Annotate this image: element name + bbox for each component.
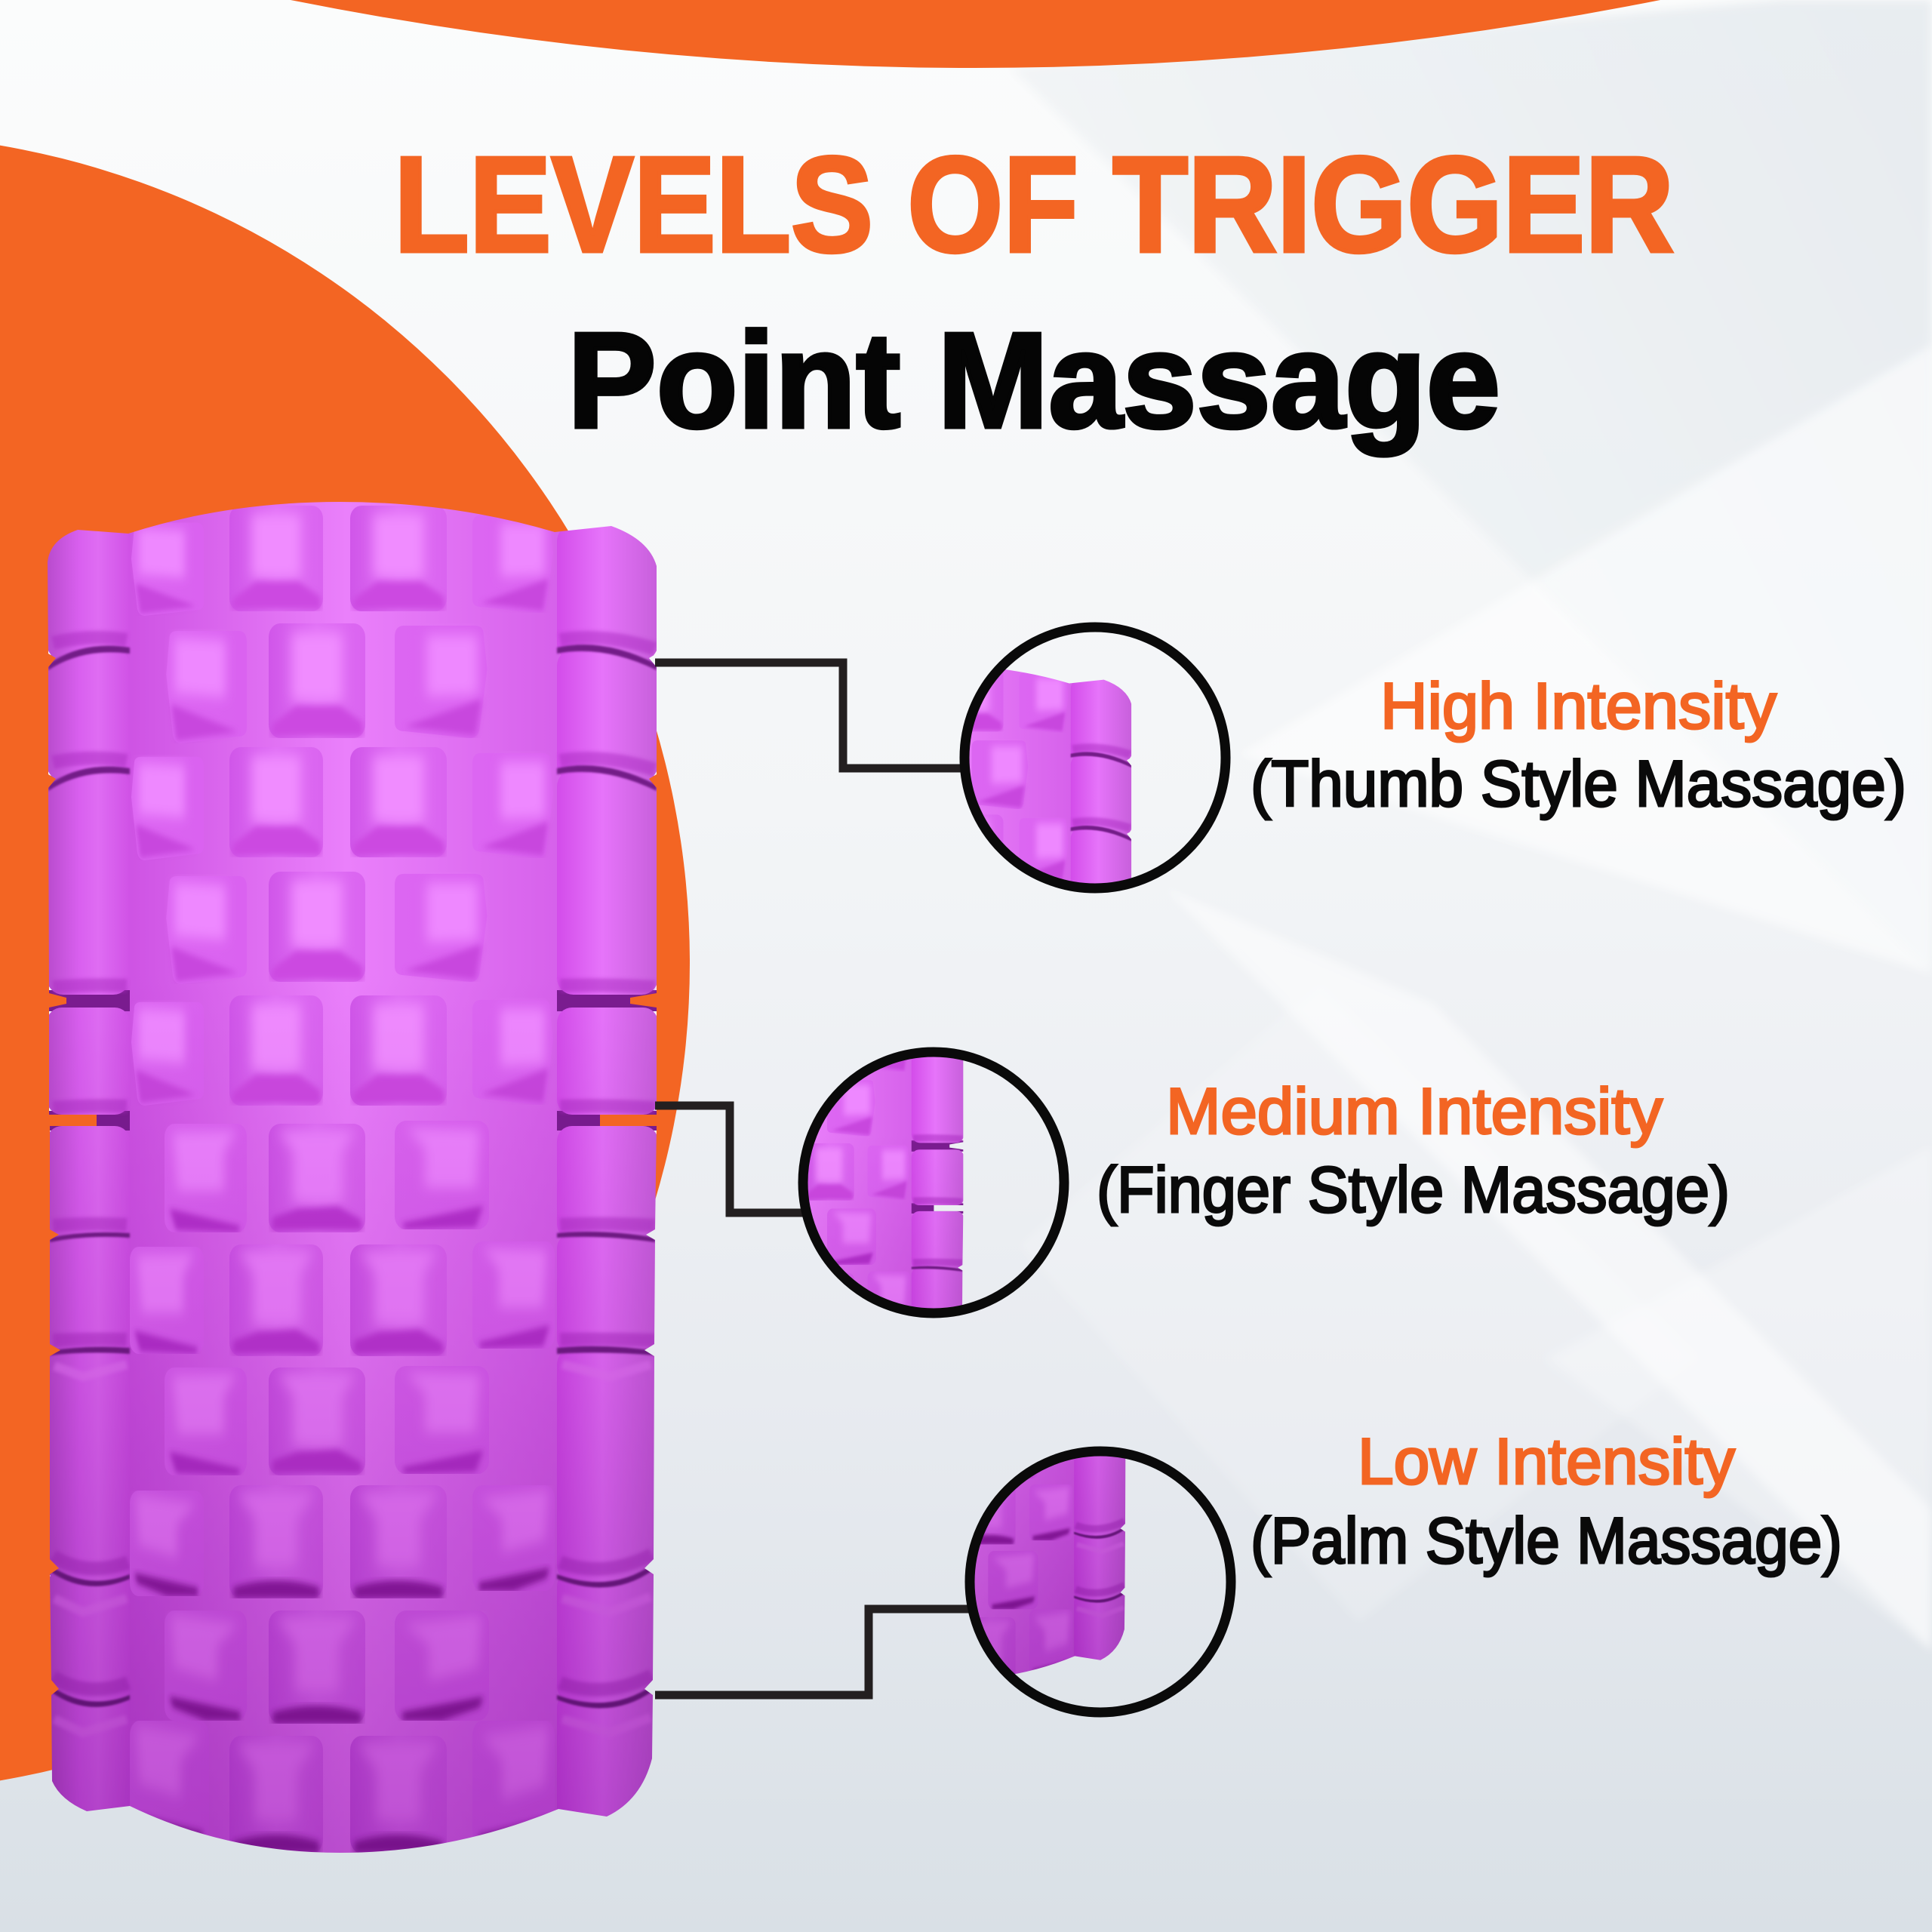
label: thumb style: (Thumb Style Massage) (1251, 748, 1906, 820)
title: levels of trigger: LEVELS OF TRIGGER (394, 129, 1674, 281)
lens: medium intensity (798, 1048, 1069, 1318)
title: point massage: Point Massage (568, 305, 1500, 457)
label: low intensity: Low Intensity (1358, 1426, 1735, 1498)
label: medium intensity: Medium Intensity (1166, 1075, 1663, 1148)
label: finger style: (Finger Style Massage) (1097, 1154, 1730, 1226)
foam roller (45, 498, 660, 1857)
connector line: high intensity (655, 663, 970, 768)
top orange arc (291, 0, 1660, 68)
connector line: low intensity (655, 1609, 974, 1695)
left orange circle (0, 134, 690, 1792)
label: high intensity: High Intensity (1380, 670, 1777, 743)
lens: high intensity (960, 622, 1230, 894)
label: palm style: (Palm Style Massage) (1251, 1505, 1842, 1577)
lens: low intensity (964, 1446, 1236, 1718)
connector line: medium intensity (655, 1106, 808, 1213)
